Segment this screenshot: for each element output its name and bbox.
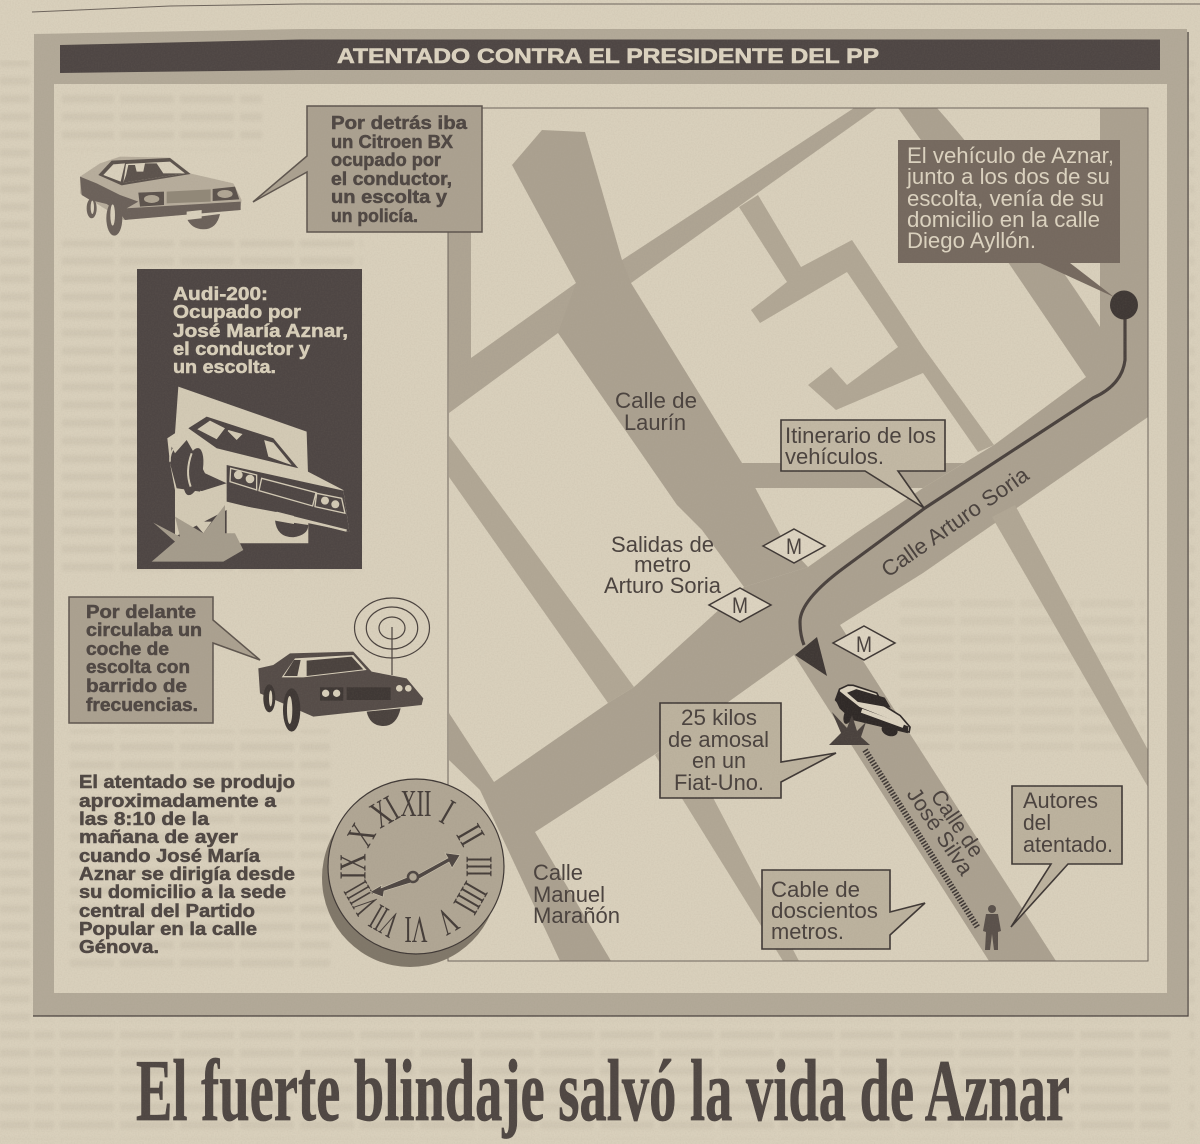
callout: perpetrators: del <box>1023 810 1051 835</box>
callout: rear car: el conductor, <box>331 169 452 189</box>
icon: clock: VII <box>363 896 407 945</box>
callout: vehicle of Aznar: junto a los dos de su <box>906 164 1110 189</box>
label: Calle de Laurín: Calle de <box>615 388 697 413</box>
icon: metro exit north <box>763 529 825 563</box>
callout: route <box>781 420 945 508</box>
callout: explosive: en un <box>692 748 746 773</box>
icon: clock: III <box>458 856 500 877</box>
callout: rear car: un policía. <box>331 206 418 226</box>
label: Salidas de metro: Salidas de <box>611 532 714 557</box>
title bar <box>60 40 1160 73</box>
map frame <box>448 108 1148 961</box>
icon: clock: I <box>433 792 461 833</box>
text block: time of attack: su domicilio a la sede <box>79 882 286 902</box>
callout: vehicle of Aznar <box>898 140 1120 297</box>
callout: route: vehículos. <box>785 444 884 469</box>
callout: cable <box>762 870 925 949</box>
label: Calle de José Silva: Calle de <box>926 785 989 862</box>
icon: metro exit west: M <box>732 593 748 618</box>
icon: escort car <box>258 652 423 732</box>
clock hands <box>370 853 460 897</box>
icon: metro exit east <box>833 626 895 660</box>
panel: Audi-200 <box>137 269 362 569</box>
map streets <box>448 108 1148 961</box>
callout: perpetrators <box>1011 786 1122 927</box>
icon: clock: VI <box>404 908 428 950</box>
callout: front car: barrido de <box>86 676 187 696</box>
icon: clock: VIII <box>336 874 388 921</box>
callout: rear car: un escolta y <box>331 187 447 207</box>
text block: time of attack: aproximadamente a <box>79 791 277 811</box>
callout: front car: escolta con <box>86 657 190 677</box>
callout: perpetrators: Autores <box>1023 788 1098 813</box>
text block: time of attack: Popular en la calle <box>79 919 257 939</box>
icon: clock: IX <box>332 854 374 880</box>
label: Salidas de metro: Arturo Soria <box>604 573 722 598</box>
callout: explosive: Fiat-Uno. <box>674 770 764 795</box>
callout: front car: frecuencias. <box>86 695 198 715</box>
callout: explosive: 25 kilos <box>681 705 757 730</box>
icon: clock <box>322 779 504 967</box>
callout: explosive <box>660 703 836 798</box>
top rule <box>32 4 1200 12</box>
callout: vehicle of Aznar: El vehículo de Aznar, <box>907 143 1114 168</box>
callout: vehicle of Aznar: Diego Ayllón. <box>907 228 1036 253</box>
icon: metro exit east: M <box>856 632 872 657</box>
cable <box>865 750 978 928</box>
icon: metro exit north: M <box>786 534 802 559</box>
icon: armoured car with backdrop <box>167 387 349 543</box>
icon: clock: II <box>448 818 492 853</box>
callout: front car: Por delante <box>86 602 196 622</box>
text block: time of attack: Aznar se dirigía desde <box>79 864 295 884</box>
start point <box>1110 290 1138 320</box>
text block: time of attack: las 8:10 de la <box>79 809 210 829</box>
icon: clock: IIII <box>445 875 495 920</box>
callout: perpetrators: atentado. <box>1023 832 1113 857</box>
callout: front car <box>69 597 260 723</box>
icon: clock: XI <box>363 788 406 837</box>
text block: time of attack: Génova. <box>79 937 159 957</box>
icon: radio frequency sweep <box>354 598 430 675</box>
route line <box>795 318 1125 676</box>
text block: time of attack: central del Partido <box>79 901 255 921</box>
icon: rear car Citroen <box>80 157 242 236</box>
callout: vehicle of Aznar: domicilio en la calle <box>907 207 1100 232</box>
label: Calle de José Silva: José Silva <box>902 783 979 880</box>
callout: front car: coche de <box>86 639 169 659</box>
Audi text: Audi-200: <box>173 284 268 304</box>
arrowhead <box>795 637 827 676</box>
icon: explosion <box>152 505 243 562</box>
callout: rear car: ocupado por <box>331 150 441 170</box>
icon: metro exit west <box>709 588 771 622</box>
Audi text: Ocupado por <box>173 302 301 322</box>
label: Calle Manuel Marañón: Marañón <box>533 903 620 928</box>
text block: time of attack: mañana de ayer <box>79 827 238 847</box>
callout: vehicle of Aznar: escolta, venía de su <box>907 186 1104 211</box>
Audi text: un escolta. <box>173 357 276 377</box>
callout: rear car: Por detrás iba <box>331 113 468 133</box>
text block: time of attack: cuando José María <box>79 846 261 866</box>
text block: time of attack: El atentado se produjo <box>79 772 295 792</box>
Audi text: el conductor y <box>173 339 310 359</box>
icon: clock: XII <box>400 783 432 825</box>
icon: explosion on map <box>829 712 870 745</box>
callout: rear car: un Citroen BX <box>331 132 453 152</box>
label: Calle de Laurín: Laurín <box>624 410 686 435</box>
icon: attacker figure <box>983 905 1001 950</box>
label: Calle Manuel Marañón: Manuel <box>533 882 605 907</box>
callout: rear car <box>253 106 482 232</box>
label: Salidas de metro: metro <box>634 552 691 577</box>
callout: cable: Cable de <box>771 877 860 902</box>
Audi text: José María Aznar, <box>173 321 348 341</box>
callout: cable: metros. <box>771 919 844 944</box>
callout: cable: doscientos <box>771 898 878 923</box>
panel: street map <box>448 108 1148 961</box>
title: ATENTADO CONTRA EL PRESIDENTE DEL PP <box>337 45 879 68</box>
icon: clock: V <box>429 898 465 943</box>
icon: clock: X <box>339 817 385 854</box>
icon: exploding car on map <box>829 681 918 745</box>
label: Calle Manuel Marañón: Calle <box>533 860 583 885</box>
callout: route: Itinerario de los <box>785 423 936 448</box>
callout: front car: circulaba un <box>86 620 202 640</box>
callout: explosive: de amosal <box>668 727 769 752</box>
label: Calle Arturo Soria: Calle Arturo Soria <box>877 461 1034 582</box>
